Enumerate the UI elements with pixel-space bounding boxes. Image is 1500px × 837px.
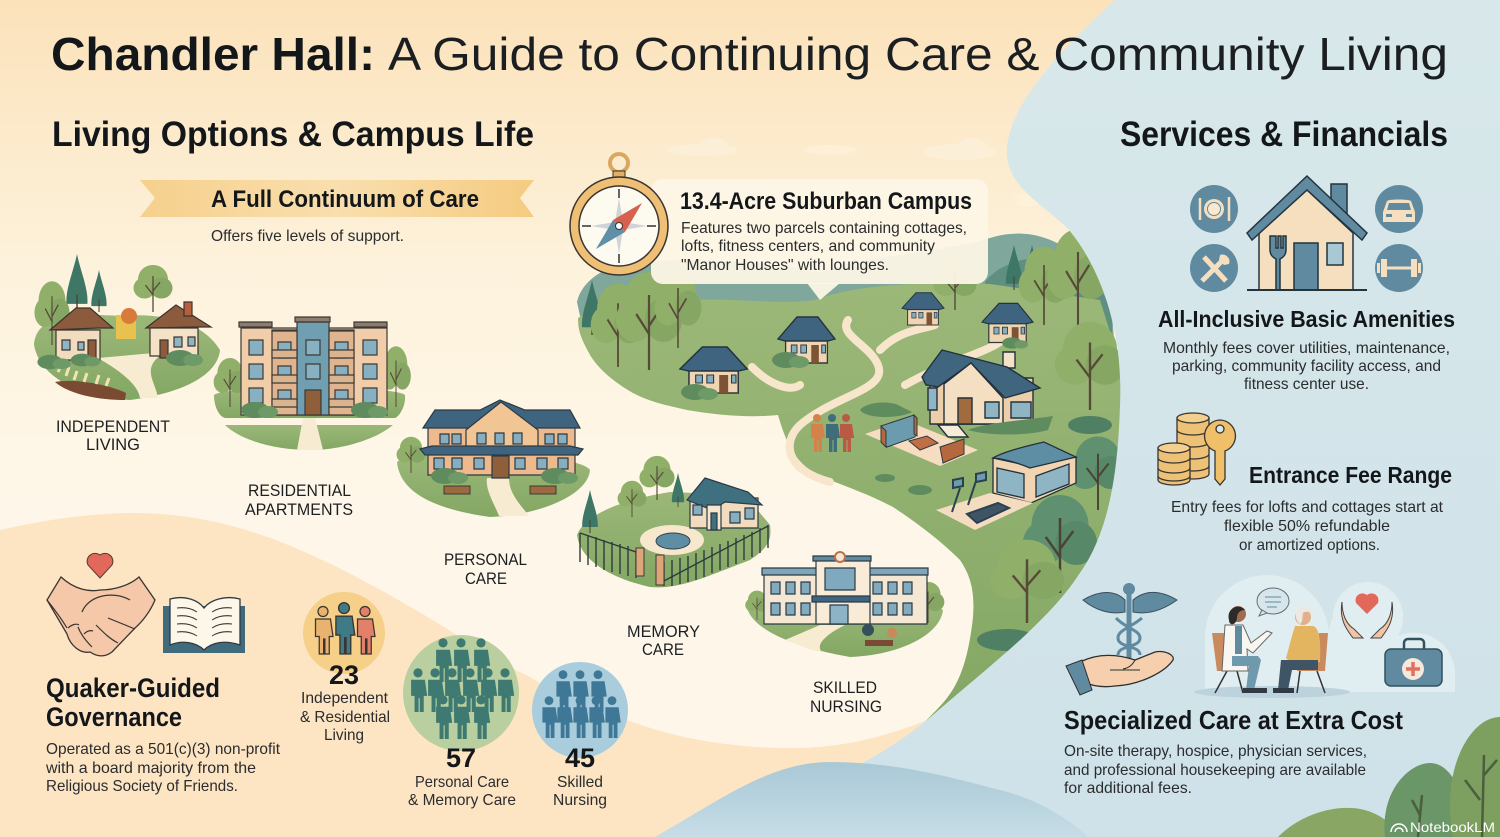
text: entrance fee: Entry fees for lofts and cottages start at xyxy=(1171,499,1444,516)
stat: 57 personal and memory care: Personal Care xyxy=(415,774,509,791)
vignette: personal care xyxy=(397,400,590,588)
label xyxy=(56,417,170,454)
blue right panel xyxy=(655,0,1500,837)
green ground xyxy=(578,283,1125,724)
clouds behind campus xyxy=(666,138,1041,207)
callout: campus: 13.4-Acre Suburban Campus xyxy=(680,188,972,215)
label xyxy=(810,678,882,716)
text: amenities: parking, community facility access, and xyxy=(1172,358,1441,375)
stat: 23 independent and residential: Living xyxy=(324,727,364,744)
icon: car xyxy=(1375,185,1423,233)
label: MEMORY xyxy=(627,622,700,641)
amenities illustration xyxy=(1190,176,1423,292)
callout: campus: Features two parcels containing cottages, xyxy=(681,220,967,237)
text: quaker governance: Quaker-Guided xyxy=(46,673,220,703)
heading: services: Services & Financials xyxy=(1120,115,1448,154)
text: amenities: All-Inclusive Basic Amenities xyxy=(1158,306,1455,332)
soft bubbles xyxy=(1205,575,1455,692)
text: specialized care xyxy=(1064,705,1403,797)
vignette: memory care xyxy=(577,456,770,659)
icon: dumbbell xyxy=(1375,244,1423,292)
label: NURSING xyxy=(810,697,882,716)
banner: continuum of care: Offers five levels of support. xyxy=(211,228,404,245)
label: PERSONAL xyxy=(444,550,527,569)
label xyxy=(444,550,527,588)
campus map xyxy=(577,0,1127,724)
callout: campus xyxy=(651,179,988,300)
text: entrance fee: flexible 50% refundable xyxy=(1224,518,1390,535)
icon: medical bag xyxy=(1385,639,1442,686)
people strolling xyxy=(811,414,854,452)
label xyxy=(627,622,700,659)
stat: 45 skilled nursing: Skilled xyxy=(557,774,603,791)
text: quaker governance: Governance xyxy=(46,702,182,732)
corner bushes xyxy=(1278,717,1500,837)
text: specialized care: Specialized Care at Extra Cost xyxy=(1064,705,1403,735)
heading: living options: Living Options & Campus Life xyxy=(52,115,534,154)
text: quaker governance: with a board majority from the xyxy=(45,760,256,777)
text: amenities: fitness center use. xyxy=(1244,376,1369,393)
vignette: independent living xyxy=(34,254,220,454)
far hills xyxy=(577,234,1118,400)
title: Chandler Hall: xyxy=(51,28,375,80)
text: specialized care: for additional fees. xyxy=(1064,780,1192,797)
specialized care illustration xyxy=(1066,575,1455,698)
stat: 23 independent and residential: 23 xyxy=(329,660,359,690)
icon: compass xyxy=(570,154,668,275)
patio furniture xyxy=(865,415,978,466)
bottom hill xyxy=(655,762,1088,837)
label: CARE xyxy=(642,640,684,659)
vignette: skilled nursing xyxy=(745,552,944,716)
stat: 45 skilled nursing xyxy=(532,662,628,809)
watermark: NotebookLM: NotebookLM xyxy=(1410,819,1495,835)
vignette: residential apartments xyxy=(214,317,411,519)
manor house xyxy=(922,350,1040,437)
text: entrance fee: or amortized options. xyxy=(1239,537,1380,554)
label: INDEPENDENT xyxy=(56,417,170,436)
stat: 45 skilled nursing: Nursing xyxy=(553,792,607,809)
label: LIVING xyxy=(86,435,140,454)
icon: caduceus on hand xyxy=(1066,583,1177,695)
icon: tools xyxy=(1190,244,1238,292)
text: quaker governance: Religious Society of Friends. xyxy=(46,778,238,795)
text: quaker governance xyxy=(45,673,281,795)
label xyxy=(245,481,353,519)
peach lower-left region xyxy=(0,513,1000,837)
stat: 57 personal and memory care xyxy=(403,635,519,809)
title: A Guide to Continuing Care & Community Living xyxy=(388,28,1448,80)
text: amenities: Monthly fees cover utilities, maintenance, xyxy=(1163,340,1450,357)
stat: 45 skilled nursing: 45 xyxy=(565,743,595,773)
stat: 57 personal and memory care: 57 xyxy=(446,743,476,773)
house icon xyxy=(1247,176,1367,290)
stat: 57 personal and memory care: & Memory Care xyxy=(408,792,516,809)
text: specialized care: and professional housekeeping are available xyxy=(1064,762,1366,779)
winding paths xyxy=(752,320,1000,482)
callout: campus: "Manor Houses" with lounges. xyxy=(681,257,889,274)
banner: continuum of care: A Full Continuum of Care xyxy=(211,186,479,213)
icon: dining xyxy=(1190,185,1238,233)
text: entrance fee xyxy=(1171,462,1452,554)
hedges xyxy=(860,403,1053,434)
text: quaker governance: Operated as a 501(c)(3) non-profit xyxy=(46,741,281,758)
label: RESIDENTIAL xyxy=(248,481,351,500)
text: entrance fee: Entrance Fee Range xyxy=(1249,462,1452,488)
stat: 23 independent and residential: & Residential xyxy=(300,709,390,726)
doctor and patient xyxy=(1212,588,1328,693)
text: amenities xyxy=(1158,306,1455,393)
label: APARTMENTS xyxy=(245,500,353,519)
treadmill xyxy=(936,472,1033,530)
lawn shrubs xyxy=(875,416,1112,651)
stat: 23 independent and residential xyxy=(300,592,390,744)
stat: 23 independent and residential: Independent xyxy=(301,690,389,707)
fitness center xyxy=(993,442,1076,503)
banner: continuum of care xyxy=(140,180,534,245)
cottages xyxy=(680,293,1033,400)
trees: left grove xyxy=(582,270,701,370)
label: SKILLED xyxy=(813,678,877,697)
label: CARE xyxy=(465,569,507,588)
icon: caring hands xyxy=(1341,593,1393,638)
icon: handshake, heart and book xyxy=(47,553,245,656)
icon: coins and key xyxy=(1158,413,1235,485)
trees: right grove xyxy=(934,0,1127,623)
callout: campus: lofts, fitness centers, and community xyxy=(681,238,935,255)
text: specialized care: On-site therapy, hospice, physician services, xyxy=(1064,743,1367,760)
